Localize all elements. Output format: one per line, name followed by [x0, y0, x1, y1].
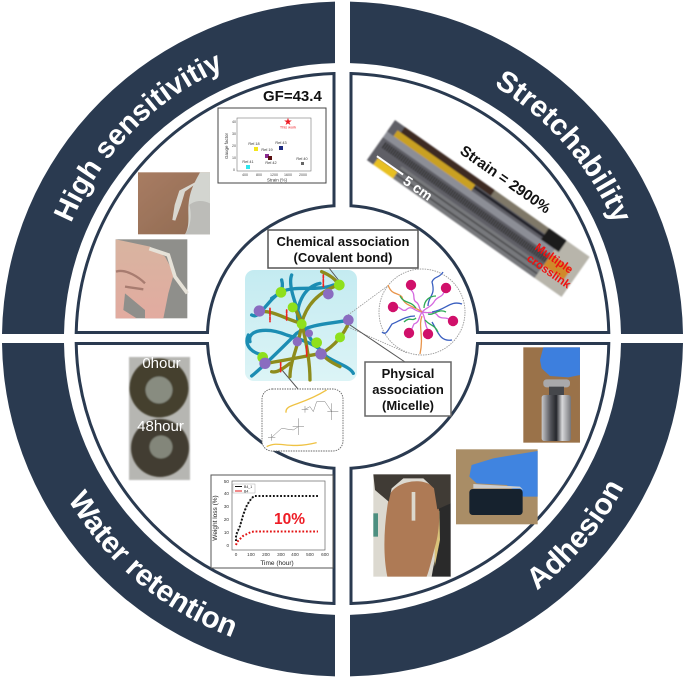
band: adhesion: Adhesion: [530, 482, 624, 590]
chart: gauge factor vs strain: 1200: [270, 173, 278, 177]
chart: gauge factor vs strain: [218, 108, 326, 183]
chart: weight loss vs time: 0: [226, 543, 229, 548]
band: stretchability: Stretchability: [496, 72, 628, 219]
chart: gauge factor vs strain: Ref.40: [296, 157, 308, 161]
chart: weight loss vs time: Time (hour): [260, 560, 294, 567]
chart: weight loss vs time: 100: [247, 552, 255, 557]
chart: weight loss vs time: [211, 475, 333, 568]
label: multiple crosslink: Multiple: [532, 242, 575, 276]
photo: sensor on finger: [116, 239, 187, 318]
band: water retention: [2, 343, 335, 676]
band: high sensitivity: High sensitivitiy: [54, 55, 219, 222]
micelle inset: [379, 269, 465, 355]
chart: gauge factor vs strain: Ref.19: [261, 148, 273, 152]
chart: weight loss vs time: 40: [224, 491, 229, 496]
band: water retention: Water retention: [70, 488, 235, 637]
chart: weight loss vs time: 50: [224, 479, 229, 484]
chart: weight loss vs time: 30: [224, 504, 229, 509]
chart: gauge factor vs strain: Ref.41: [242, 160, 254, 164]
label: physical association: Physical: [382, 366, 434, 381]
chart: weight loss vs time: 500: [306, 552, 314, 557]
band: adhesion: [350, 343, 683, 676]
photo: coins 0 and 48 hours: 0hour: [142, 355, 181, 372]
chart: gauge factor vs strain: 10: [232, 156, 236, 160]
chart: gauge factor vs strain: 30: [232, 132, 236, 136]
chart: weight loss vs time: 400: [291, 552, 299, 557]
chart: weight loss vs time: 20: [224, 517, 229, 522]
label: physical association: [365, 362, 451, 416]
photo: weight held by glove: [523, 347, 580, 443]
chart: weight loss vs time: 600: [321, 552, 329, 557]
chart: gauge factor vs strain: 1600: [284, 173, 292, 177]
coin: 0 hour: [130, 358, 188, 418]
chart: gauge factor vs strain: Ref.42: [265, 161, 277, 165]
panel frames: [76, 74, 609, 604]
photo: coins 0 and 48 hours: 48hour: [137, 418, 184, 435]
label: chemical association: (Covalent bond): [294, 250, 392, 265]
heading: GF value: GF=43.4: [263, 88, 322, 105]
chart: weight loss vs time: B4_1: [244, 485, 252, 489]
band: high sensitivity: [2, 2, 335, 334]
chart: weight loss vs time: 300: [277, 552, 285, 557]
network diagram background: [245, 270, 357, 381]
molecule inset: [262, 389, 343, 451]
chart: gauge factor vs strain: Strain (%): [267, 178, 287, 182]
polymer network: [247, 272, 354, 380]
chart: gauge factor vs strain: 20: [232, 144, 236, 148]
chart: weight loss vs time: Weight loss (%): [212, 495, 219, 541]
label: multiple crosslink: crosslink: [524, 253, 573, 292]
chart: weight loss vs time: 200: [262, 552, 270, 557]
chart: gauge factor vs strain: ★: [284, 117, 293, 128]
chart: gauge factor vs strain: Gauge factor: [224, 132, 229, 159]
band: stretchability: [350, 2, 683, 334]
chart: gauge factor vs strain: 400: [242, 173, 248, 177]
chart: weight loss vs time: 0: [235, 552, 238, 557]
connector lines: [282, 268, 407, 389]
label: physical association: (Micelle): [382, 398, 434, 413]
chart: gauge factor vs strain: 40: [232, 120, 236, 124]
photo: cap lifted by finger: [456, 449, 538, 524]
photo: coins 0 and 48 hours: [129, 355, 190, 480]
label: 5 cm: 5 cm: [400, 172, 436, 204]
label: chemical association: [268, 230, 418, 268]
chart: weight loss vs time: 10: [224, 530, 229, 535]
chart: gauge factor vs strain: This work: [280, 126, 296, 130]
photo: stretched sensor: [367, 120, 590, 297]
photo: sensor on neck: [138, 172, 210, 234]
chart: gauge factor vs strain: 0: [233, 168, 235, 172]
photo: sensor on knee: [373, 474, 451, 577]
chart: gauge factor vs strain: Ref.18: [248, 142, 260, 146]
label: strain value: Strain = 2900%: [457, 142, 554, 217]
chart: weight loss vs time: 10%: [274, 511, 305, 528]
chart: gauge factor vs strain: Ref.43: [275, 141, 287, 145]
scale line: [377, 156, 403, 175]
chart: gauge factor vs strain: 800: [256, 173, 262, 177]
chart: gauge factor vs strain: 2000: [299, 173, 307, 177]
label: chemical association: Chemical association: [277, 234, 410, 249]
label: physical association: association: [372, 382, 444, 397]
chart: weight loss vs time: B4: [244, 490, 248, 494]
coin: 48 hours: [131, 419, 189, 477]
